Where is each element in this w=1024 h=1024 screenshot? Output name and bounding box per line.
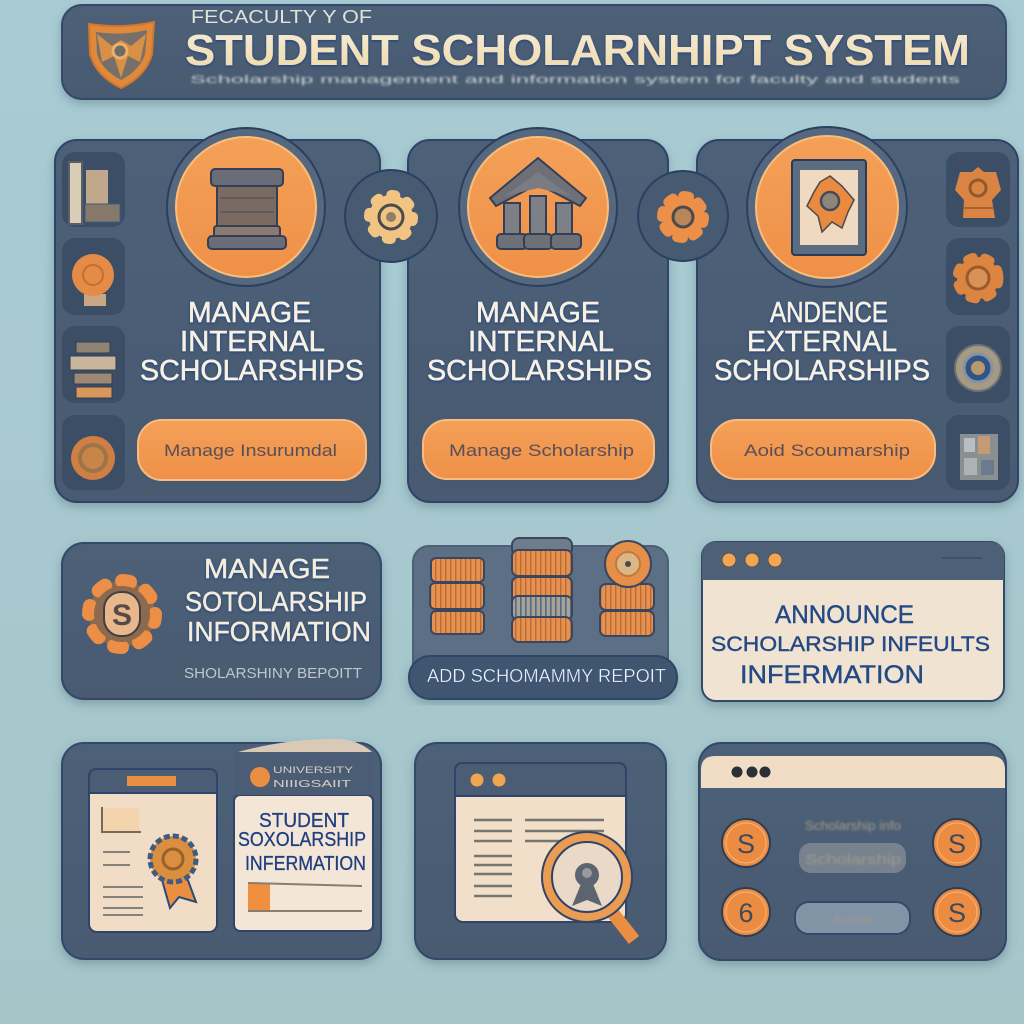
- coin button top left: S: [737, 829, 755, 859]
- connector: gear between panels 1 and 2: [345, 170, 437, 262]
- icon: certificate tablet in orange circle: [747, 127, 907, 287]
- button: [711, 420, 935, 479]
- pill label: [409, 656, 677, 699]
- panel heading: ANDENCE: [770, 297, 888, 329]
- panel caption: SHOLARSHINY BEPOITT: [184, 665, 362, 682]
- blurred field: Scholarship: [805, 851, 901, 867]
- title: STUDENT SCHOLARNHIPT SYSTEM: [185, 26, 970, 75]
- action pill: Submit: [833, 915, 873, 926]
- panel heading: SCHOLARSHIPS: [714, 355, 930, 387]
- pill label: ADD SCHOMAMMY REPOIT: [427, 666, 666, 686]
- card: certificate with ribbon: [89, 769, 217, 932]
- button: [138, 420, 366, 480]
- coin button top left: [722, 819, 770, 867]
- icon: coin stack centre: [512, 538, 572, 642]
- panel: search window: [415, 743, 666, 959]
- window text: SCHOLARSHIP INFEULTS: [711, 633, 990, 656]
- panel: manage internal scholarships 1: [55, 128, 380, 502]
- panel: manage internal scholarships 2: [408, 128, 668, 502]
- panel heading: MANAGE: [476, 297, 600, 329]
- card: student scholarship information: SOXOLARSHIP: [238, 829, 366, 851]
- panel heading: [714, 297, 930, 387]
- icon tile: gear badge: [946, 152, 1010, 227]
- window text: [711, 601, 990, 689]
- icon: orange gear with S: [89, 581, 155, 647]
- card: student scholarship information: STUDENT: [259, 810, 349, 832]
- icon: scroll in orange circle: [167, 128, 325, 286]
- blurred field: [799, 843, 906, 873]
- icon tile: document map: [946, 415, 1010, 490]
- icon tile: stacked papers: [62, 326, 125, 403]
- panel heading: EXTERNAL: [747, 326, 897, 358]
- panel heading: [427, 297, 652, 387]
- window title bar: [702, 542, 1004, 580]
- card: student scholarship information: UNIVERSITY: [273, 765, 353, 775]
- card: student scholarship information: [234, 739, 373, 931]
- icon tile: books: [62, 152, 125, 227]
- panel heading: [185, 553, 371, 647]
- button: Aoid Scoumarship: [744, 441, 910, 460]
- coin button bottom left: 6: [738, 898, 754, 928]
- blurred label: Scholarship info: [805, 818, 901, 833]
- icon tile: medal: [62, 238, 125, 315]
- panel: announce scholarship results window: [702, 542, 1004, 701]
- panel: manage scholarship information: [62, 543, 381, 699]
- icon: magnifier with ribbon: [542, 832, 634, 940]
- panel heading: INTERNAL: [180, 326, 325, 358]
- icon: faculty shield crest: [89, 22, 154, 88]
- panel heading: SCHOLARSHIPS: [427, 355, 652, 387]
- icon tile: seal: [62, 415, 125, 490]
- panel heading: MANAGE: [204, 553, 330, 584]
- panel heading: [140, 297, 364, 387]
- coin button bottom right: S: [948, 898, 966, 928]
- header banner: [62, 5, 1006, 99]
- panel: announce external scholarships: [697, 127, 1018, 502]
- icon tile: ring badge: [946, 326, 1010, 403]
- action pill: [795, 902, 910, 934]
- panel heading: INFORMATION: [187, 616, 371, 647]
- window title bar: [701, 756, 1005, 788]
- window text: ANNOUNCE: [775, 601, 914, 629]
- icon tile: orange gear: [946, 238, 1010, 315]
- window text: INFERMATION: [740, 661, 924, 689]
- panel heading: SCHOLARSHIPS: [140, 355, 364, 387]
- icon: institution in orange circle: [459, 128, 617, 286]
- header eyebrow text: FECACULTY Y OF: [191, 7, 372, 27]
- header subtitle: Scholarship management and information system for faculty and students: [190, 74, 961, 86]
- panel: dashboard window: [699, 743, 1006, 960]
- coin button bottom right: [933, 888, 981, 936]
- icon: orange gear with S: S: [112, 599, 132, 632]
- card: student scholarship information: INFERMATION: [245, 853, 366, 875]
- panel: add scholarship report: [409, 538, 677, 699]
- panel heading: INTERNAL: [468, 326, 614, 358]
- panel: certificate and student information cards: [62, 739, 381, 959]
- connector: gear between panels 2 and 3: [638, 171, 728, 261]
- coin button bottom left: [722, 888, 770, 936]
- coin button top right: [933, 819, 981, 867]
- card: student scholarship information: NIIIGSAIIT: [273, 779, 351, 790]
- panel heading: MANAGE: [188, 297, 311, 329]
- browser window: [455, 763, 626, 922]
- button: Manage Scholarship: [449, 441, 634, 460]
- icon: coin stack left: [430, 558, 484, 634]
- button: Manage Insurumdal: [164, 441, 337, 460]
- icon: rosette ribbon: [150, 836, 196, 908]
- icon: coin stack right with medal: [600, 541, 654, 636]
- panel heading: SOTOLARSHIP: [185, 586, 367, 617]
- coin button top right: S: [948, 829, 966, 859]
- button: [423, 420, 654, 479]
